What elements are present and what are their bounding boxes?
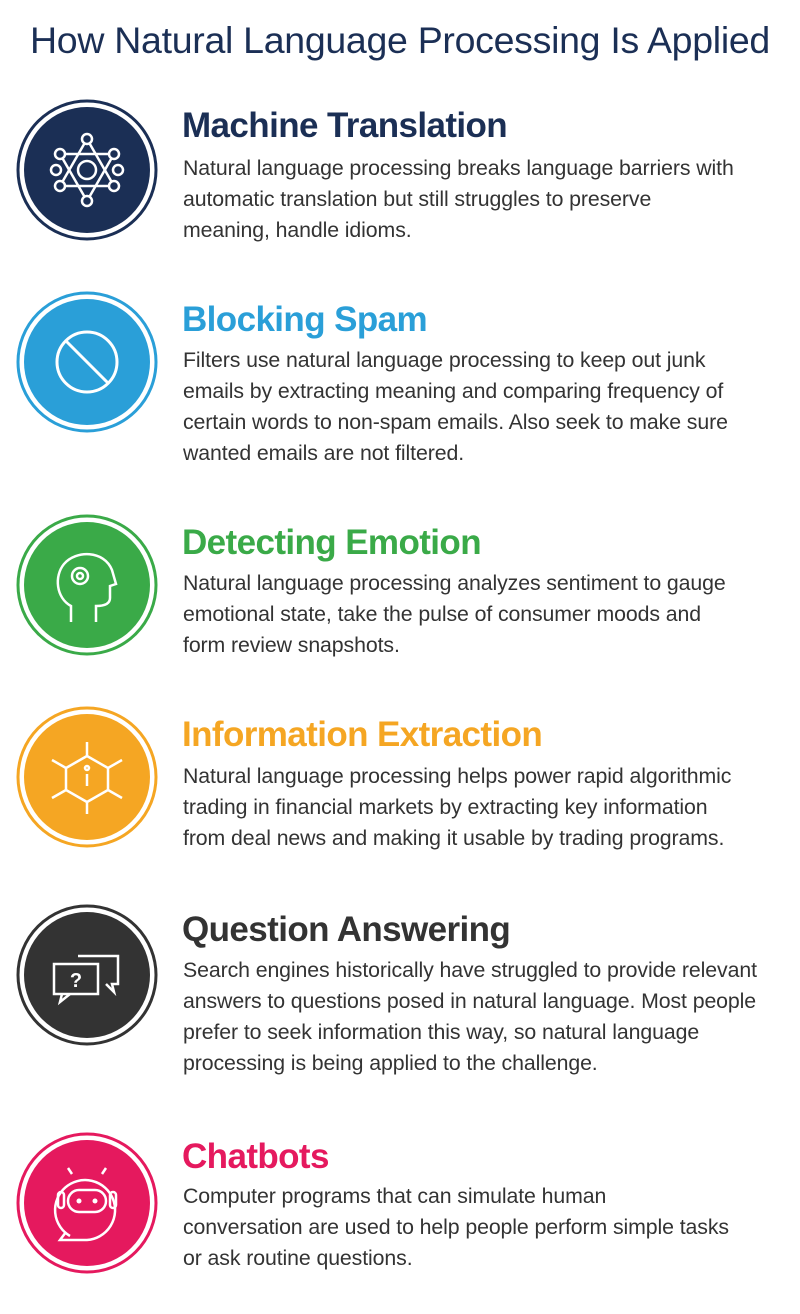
icon: detecting emotion — [16, 514, 158, 656]
text: information extraction: trading in financial markets by extracting key information — [183, 795, 708, 819]
text: detecting emotion: Natural language processing analyzes sentiment to gauge — [183, 571, 726, 595]
text: information extraction — [183, 764, 731, 850]
text: question answering: processing is being applied to the challenge. — [183, 1051, 598, 1075]
text: blocking spam: Filters use natural language processing to keep out junk — [183, 348, 705, 372]
text: detecting emotion: form review snapshots. — [183, 633, 400, 657]
heading: blocking spam: Blocking Spam — [182, 300, 427, 339]
text: information extraction: from deal news and making it usable by trading programs. — [183, 826, 724, 850]
text: chatbots: conversation are used to help people perform simple tasks — [183, 1215, 729, 1239]
text: question answering: prefer to seek information this way, so natural language — [183, 1020, 699, 1044]
icon: question answering: ? — [70, 970, 82, 992]
heading: machine translation: Machine Translation — [182, 106, 507, 145]
text: machine translation — [183, 156, 734, 242]
text: question answering: answers to questions posed in natural language. Most people — [183, 989, 756, 1013]
text: detecting emotion: emotional state, take the pulse of consumer moods and — [183, 602, 701, 626]
icon: information extraction — [16, 706, 158, 848]
text: chatbots — [183, 1184, 729, 1270]
text: machine translation: meaning, handle idioms. — [183, 218, 412, 242]
text: information extraction: Natural language processing helps power rapid algorithmic — [183, 764, 731, 788]
text: question answering: Search engines historically have struggled to provide relevant — [183, 958, 757, 982]
icon: chatbots — [16, 1132, 158, 1274]
icon: question answering — [16, 904, 158, 1046]
heading: information extraction: Information Extraction — [182, 715, 542, 754]
heading: detecting emotion: Detecting Emotion — [182, 523, 481, 562]
text: chatbots: Computer programs that can simulate human — [183, 1184, 606, 1208]
heading: chatbots: Chatbots — [182, 1137, 329, 1176]
text: machine translation: Natural language processing breaks language barriers with — [183, 156, 734, 180]
text: chatbots: or ask routine questions. — [183, 1246, 413, 1270]
text: machine translation: automatic translation but still struggles to preserve — [183, 187, 651, 211]
icon: machine translation — [16, 100, 158, 240]
text: blocking spam: wanted emails are not filtered. — [183, 441, 464, 465]
text: blocking spam: emails by extracting meaning and comparing frequency of — [183, 379, 723, 403]
text: question answering — [183, 958, 757, 1075]
icon: blocking spam — [16, 292, 158, 432]
heading: question answering: Question Answering — [182, 910, 510, 949]
title: How Natural Language Processing Is Applied — [30, 19, 770, 61]
text: blocking spam: certain words to non-spam emails. Also seek to make sure — [183, 410, 728, 434]
text: detecting emotion — [183, 571, 726, 657]
text: blocking spam — [183, 348, 728, 465]
